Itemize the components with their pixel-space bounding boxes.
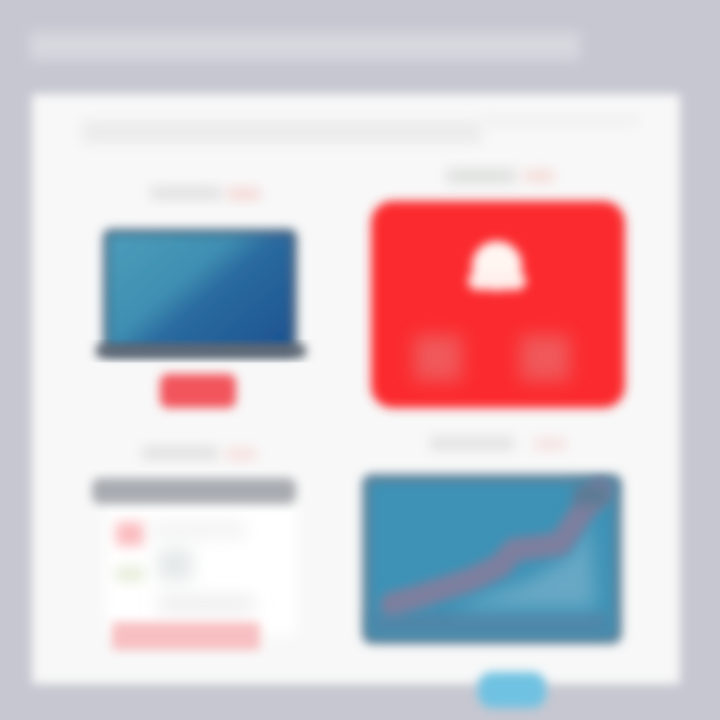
red card background: [371, 201, 625, 408]
line chart: [392, 490, 600, 604]
monitor screen: [366, 478, 618, 640]
panel: red card: [371, 168, 625, 408]
list label: [142, 446, 256, 460]
red card stat right: [520, 335, 570, 381]
list red button: [112, 622, 260, 650]
laptop base: [96, 344, 306, 358]
laptop screen: [106, 232, 294, 352]
blue button: [478, 672, 546, 708]
monitor corner shade: [574, 484, 608, 506]
icon: white circle: [468, 241, 526, 291]
list green icon: [116, 566, 144, 582]
red card label: [446, 168, 554, 184]
laptop label: [150, 186, 260, 200]
list header bar: [92, 478, 296, 504]
panel: list: [92, 446, 296, 650]
main white panel: [32, 94, 680, 684]
list red icon: [116, 522, 144, 546]
panel: laptop: [96, 186, 306, 408]
monitor bottom band: [372, 612, 608, 634]
list white card: [106, 505, 296, 635]
title bar: [30, 32, 580, 60]
panel: chart monitor: [366, 436, 618, 640]
list text lines: [150, 524, 254, 610]
red button: [160, 374, 236, 408]
red card stat left: [414, 335, 462, 381]
chart label: [430, 436, 566, 451]
intro text line: [82, 120, 482, 144]
area under line: [450, 520, 596, 608]
